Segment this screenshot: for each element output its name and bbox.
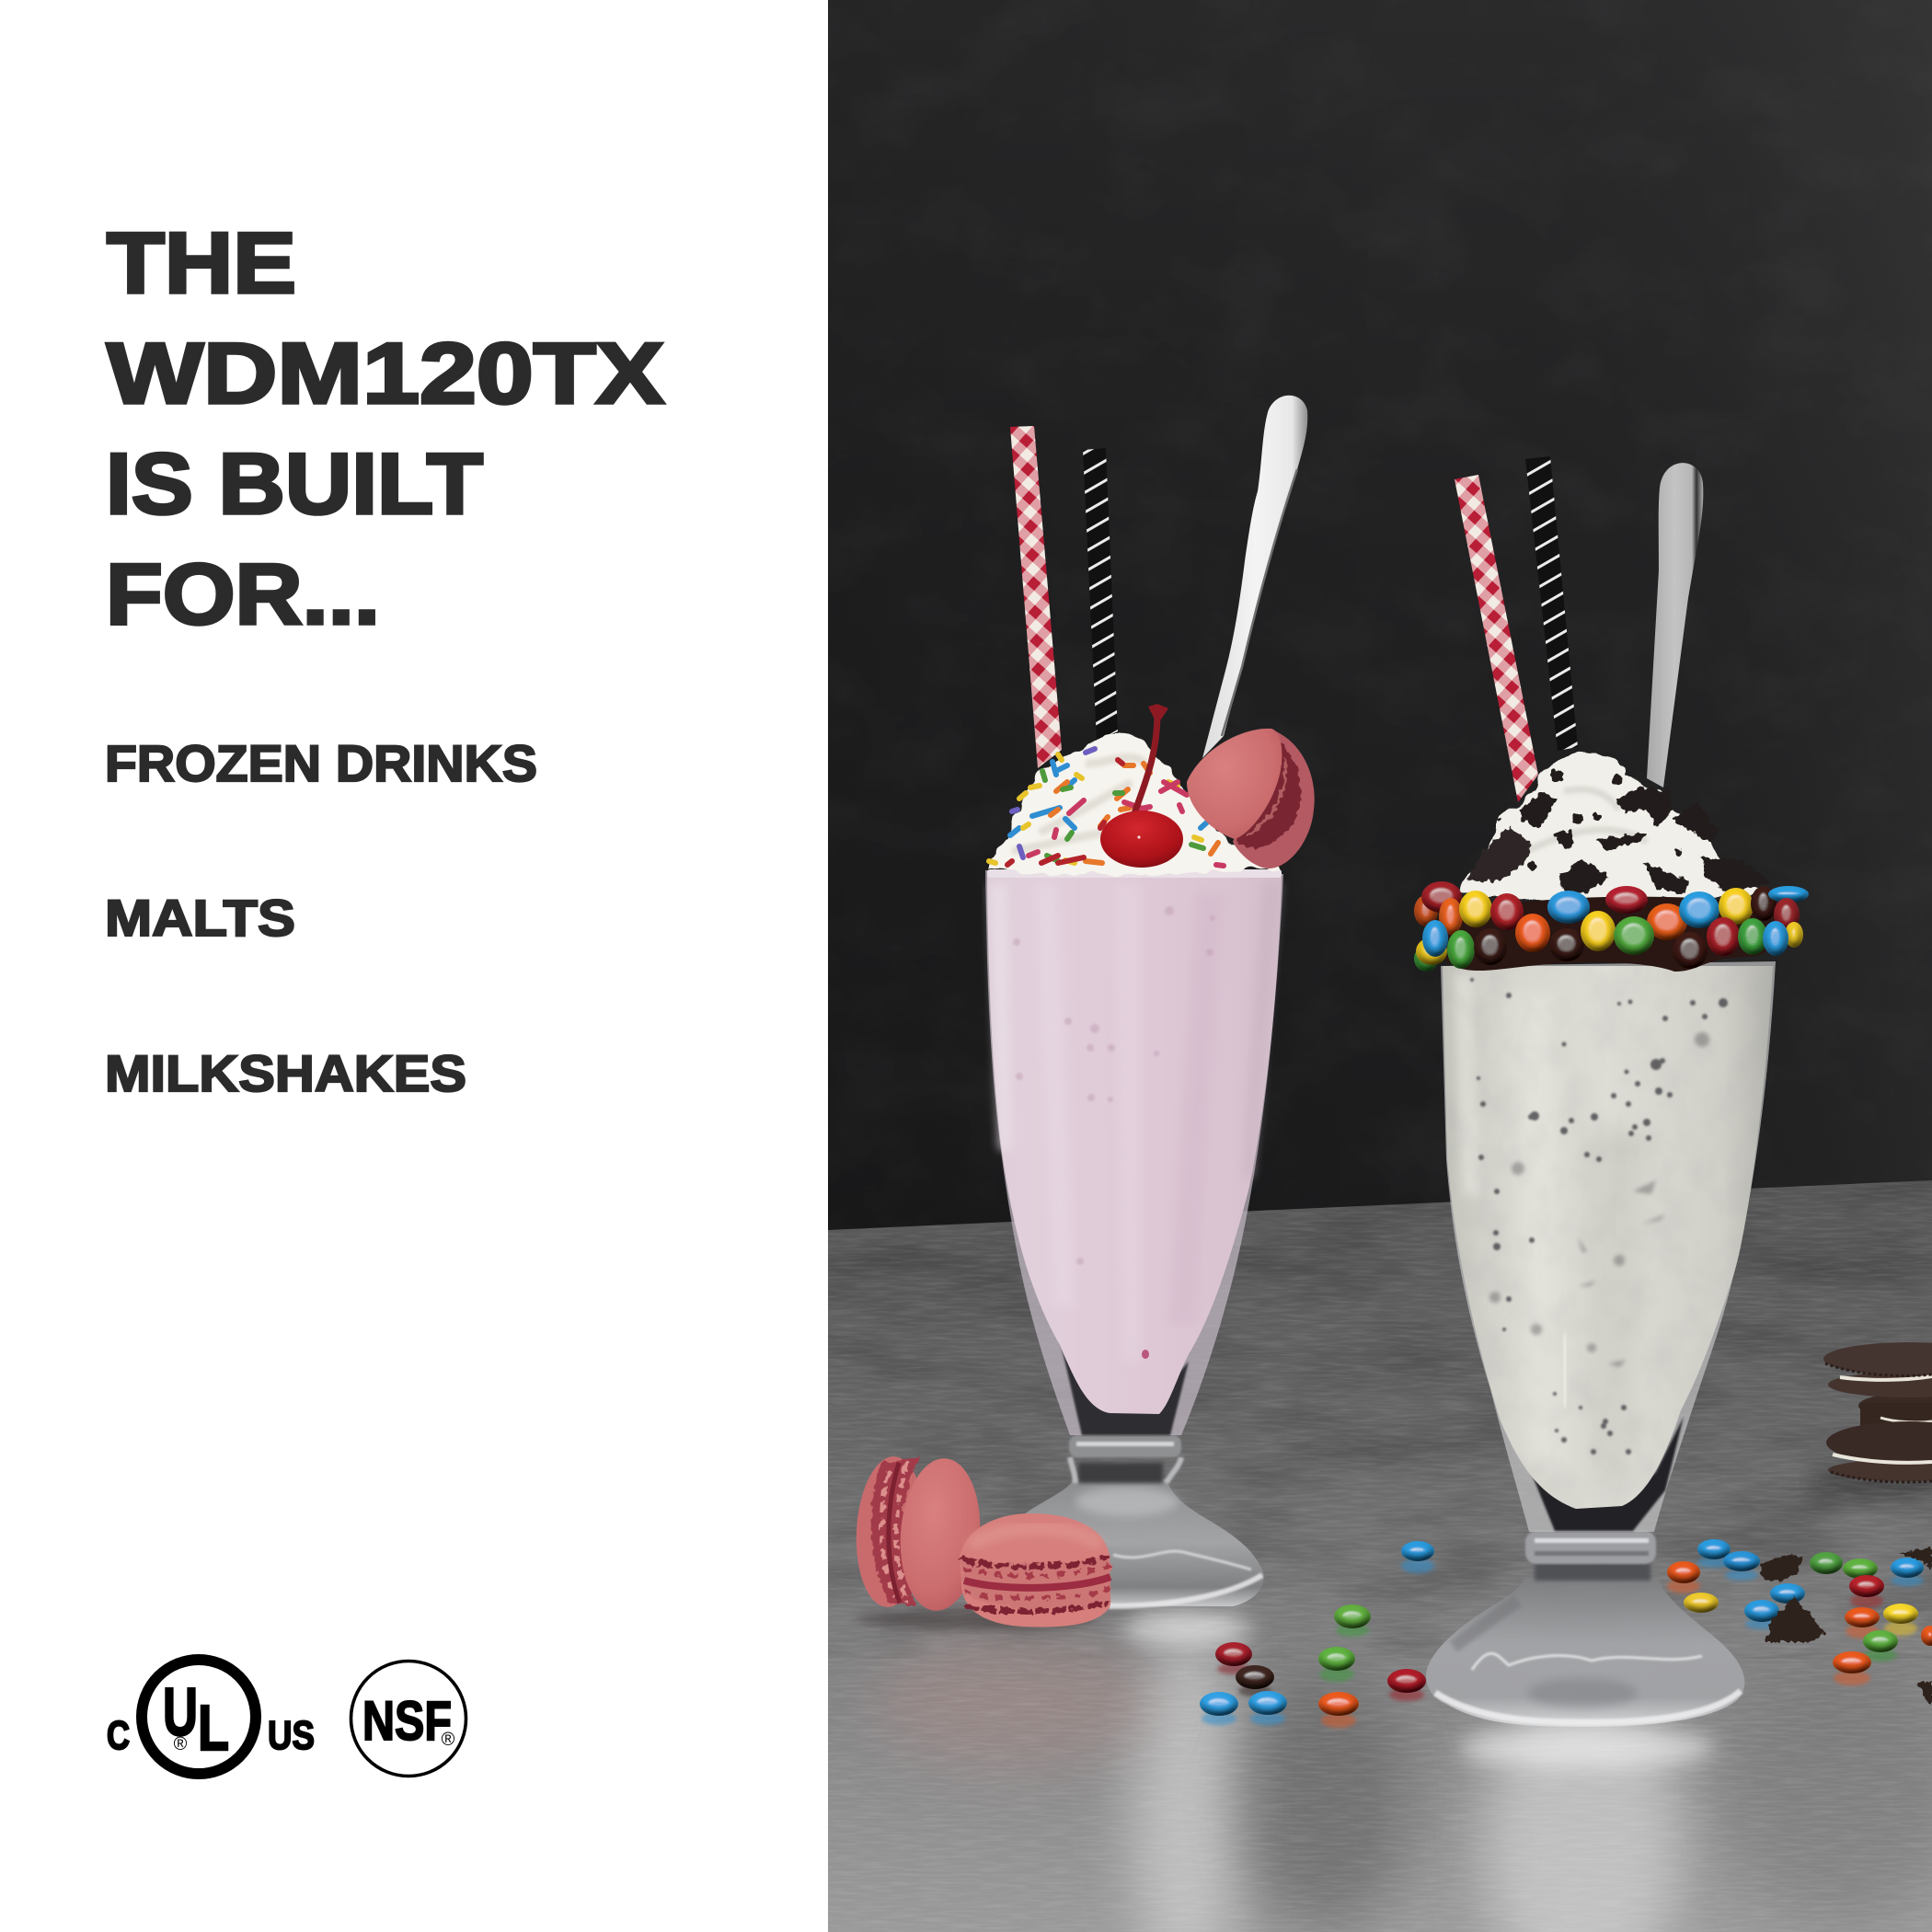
glass 2: stem and foot xyxy=(1426,1531,1744,1727)
brushed steel counter xyxy=(828,1180,1932,1932)
icon: cULus certification mark: US xyxy=(268,1713,315,1758)
glass 2: whipped cream with cookie chunks xyxy=(1456,750,1771,903)
sprinkles xyxy=(1010,762,1209,835)
glass 2: red gingham straw xyxy=(1455,475,1538,802)
panel: milkshake photo xyxy=(828,0,1932,1932)
glass 2: spoon handle xyxy=(1647,463,1703,788)
icon: cULus certification mark: C xyxy=(107,1713,130,1758)
candies scattered on counter xyxy=(1200,1539,1932,1728)
list item: malts: MALTS xyxy=(105,889,295,947)
title line 2: WDM120TX xyxy=(107,325,664,421)
title xyxy=(106,214,664,642)
chocolate cookie pieces on counter xyxy=(1760,1547,1932,1704)
glass 1: cherry with stem xyxy=(1100,704,1183,868)
icon: cULus certification mark: ® xyxy=(174,1734,188,1754)
glass 1: whipped cream and sprinkles xyxy=(986,733,1281,874)
glass 1: pink milkshake xyxy=(987,869,1282,1414)
list item: milkshakes: MILKSHAKES xyxy=(105,1044,466,1102)
icon: NSF certification mark: NSF xyxy=(362,1690,452,1752)
glass 2: cookies and cream milkshake xyxy=(1443,966,1774,1509)
glass 1: stem and foot xyxy=(1025,1435,1264,1610)
icon: NSF certification mark xyxy=(351,1662,466,1776)
title line 3: IS BUILT xyxy=(106,435,483,532)
glass 1: macaron on rim xyxy=(1187,729,1315,868)
glass 2: chocolate rim xyxy=(1425,897,1791,972)
glass 1: dark reflection under milkshake xyxy=(1060,1340,1189,1435)
icon: cULus certification mark: L xyxy=(198,1692,229,1764)
list item: frozen drinks: FROZEN DRINKS xyxy=(105,734,537,792)
list of drink types xyxy=(105,734,537,1102)
glass 1: spoon handle xyxy=(1202,396,1307,758)
title line 1: THE xyxy=(107,214,296,311)
cookie speckles xyxy=(1470,978,1728,1455)
title line 4: FOR... xyxy=(106,546,380,642)
glass 2: glass body xyxy=(1441,961,1776,1532)
glass 2: black twisted straw xyxy=(1525,456,1578,751)
glass 2: candy coated rim xyxy=(1414,881,1809,972)
glass 2: dark reflection under milkshake xyxy=(1527,1417,1684,1531)
glass 1: black twisted straw xyxy=(1083,448,1118,741)
glass 1: glass body xyxy=(985,870,1283,1435)
icon: cULus certification mark: U xyxy=(163,1675,198,1750)
glass 1: red gingham straw xyxy=(1010,426,1062,768)
dark slate wall xyxy=(828,0,1932,1237)
pink macarons on counter xyxy=(853,1455,1110,1630)
icon: NSF certification mark: ® xyxy=(442,1730,455,1750)
stack of chocolate sandwich cookies xyxy=(1823,1342,1932,1482)
panel: white text column xyxy=(0,0,828,1932)
cookie chunks xyxy=(1467,769,1771,894)
candy reflections xyxy=(1202,1557,1924,1728)
icon: cULus certification mark xyxy=(107,1660,315,1774)
